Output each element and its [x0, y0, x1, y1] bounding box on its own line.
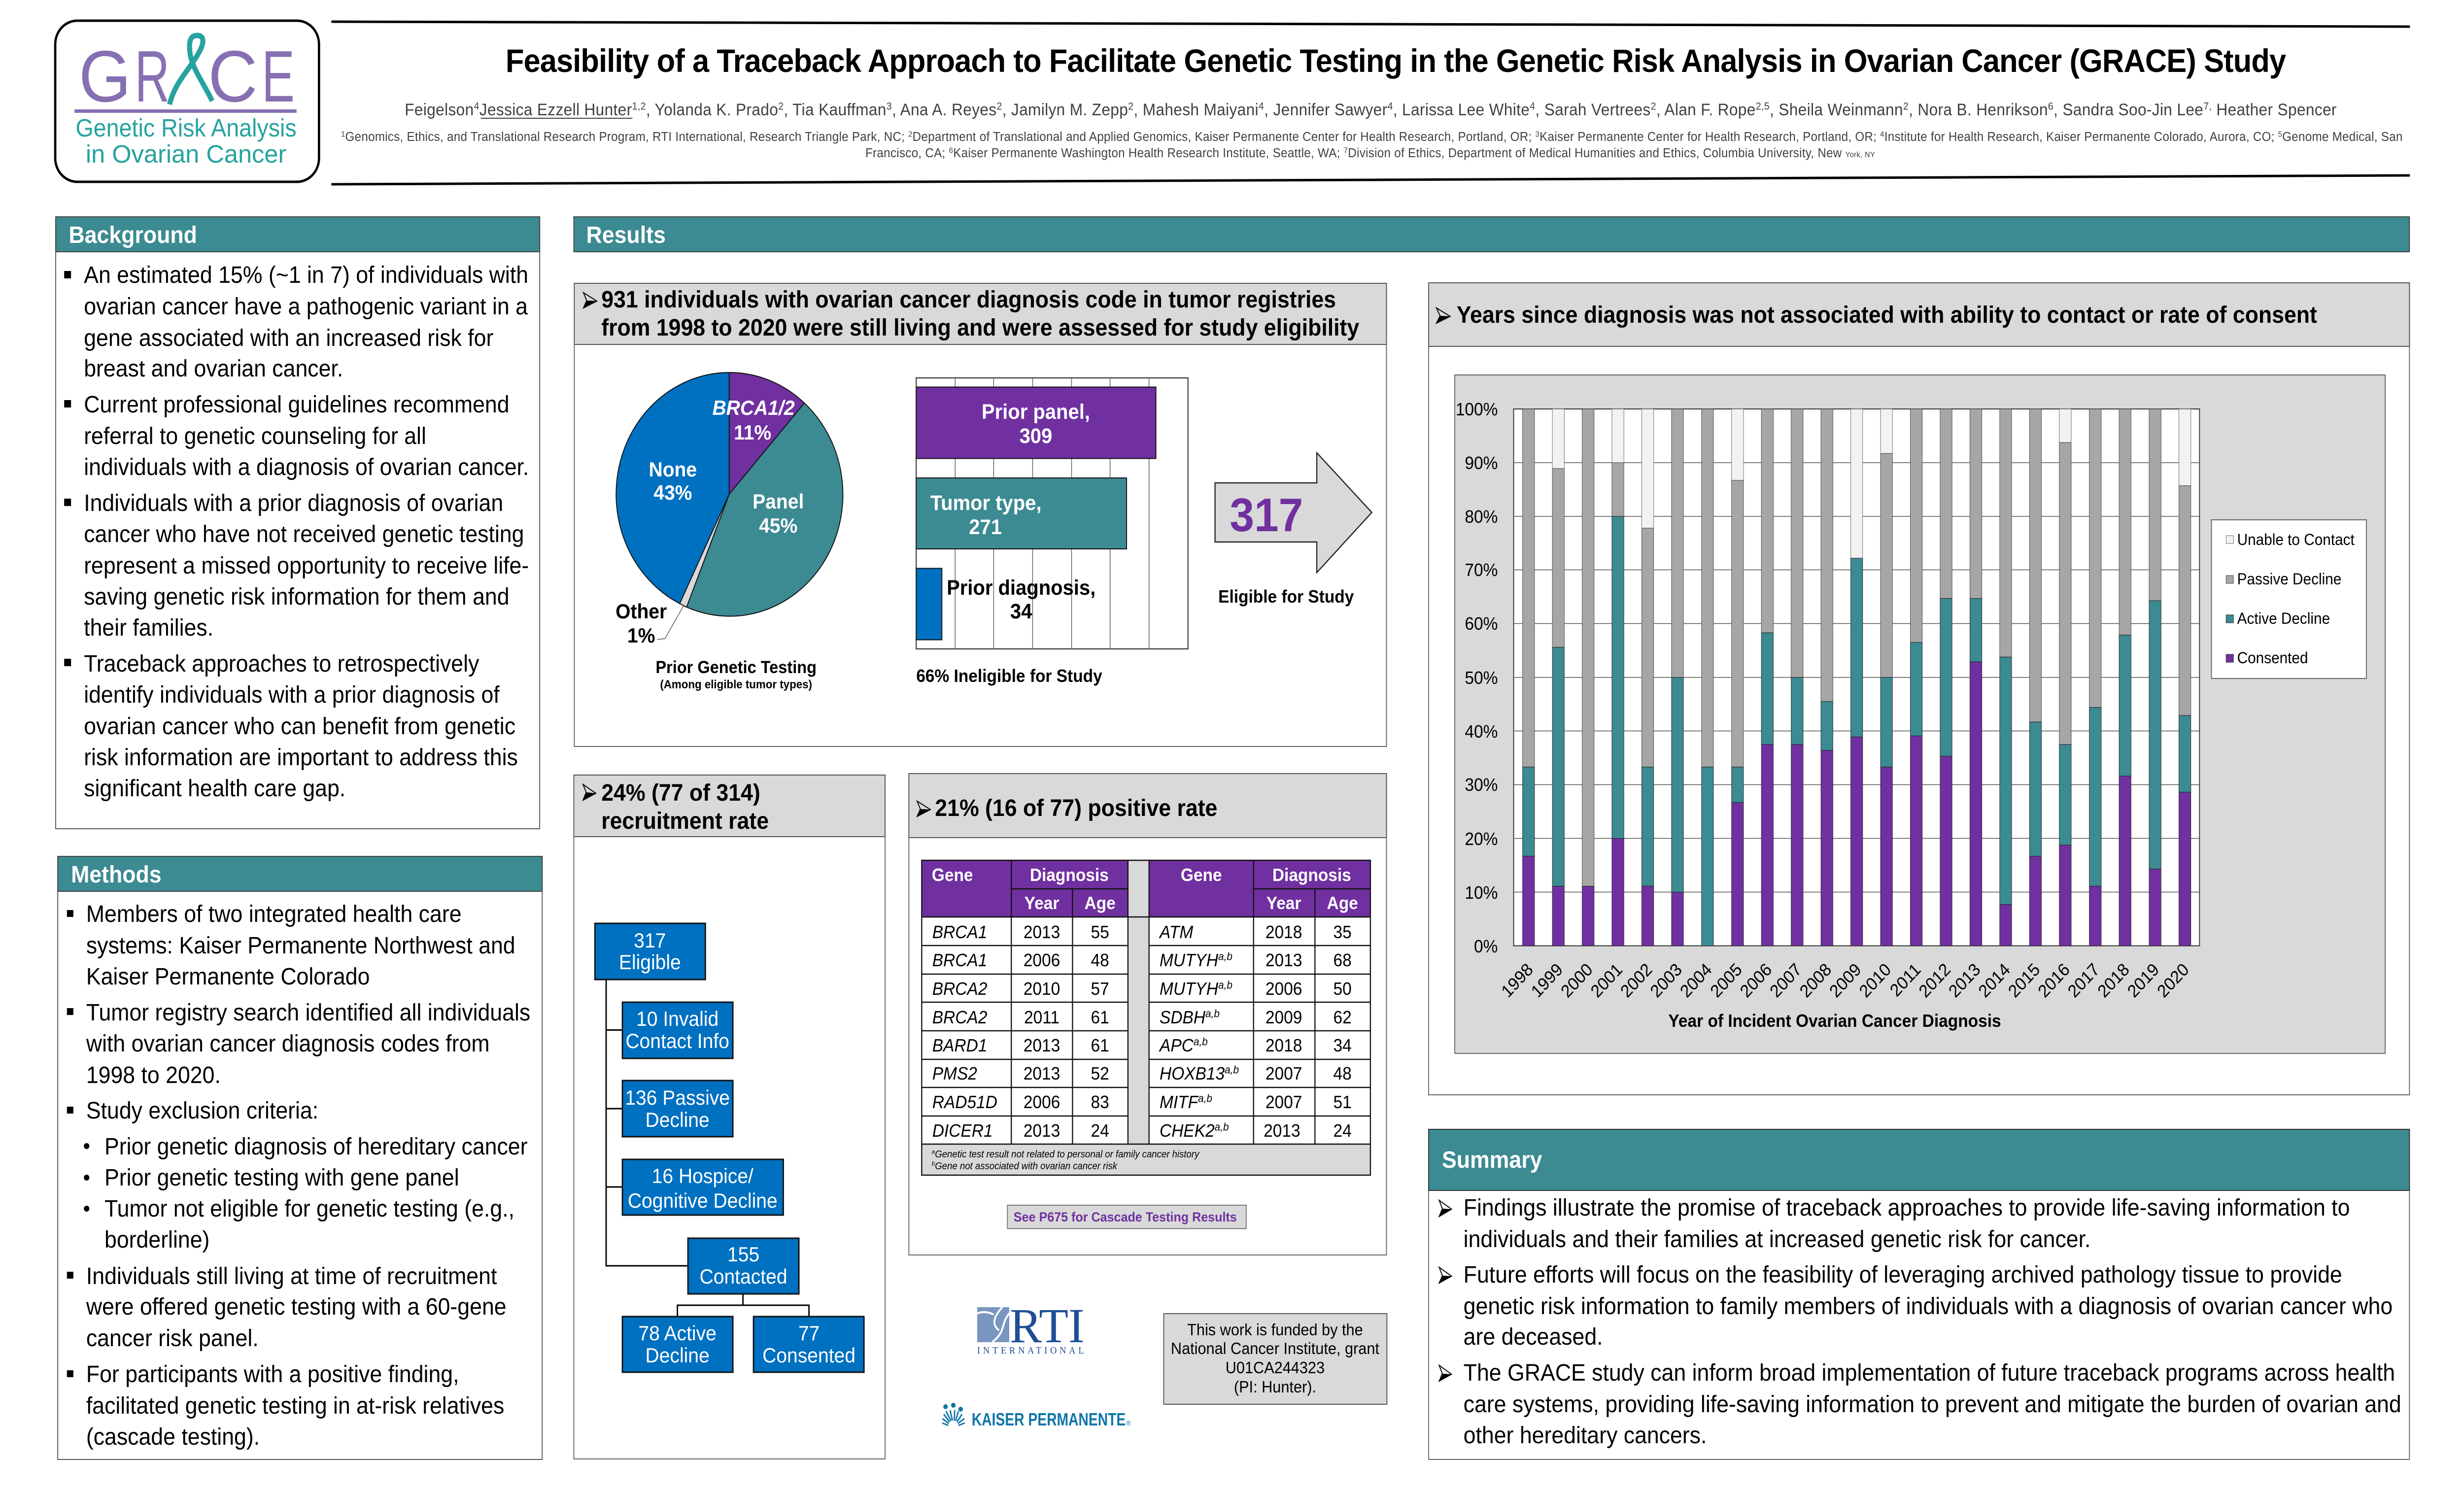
panel: years since diagnosis [1429, 283, 2409, 1095]
bullet: prevalence [64, 262, 528, 381]
legend [2212, 520, 2366, 678]
title: Feasibility of a Traceback Approach to Facilitate Genetic Testing in the Genetic Risk Analysis in Ovarian Cancer (GRACE) Study [506, 42, 2287, 79]
authors: Feigelson4Jessica Ezzell Hunter1,2, Yolanda K. Prado2, Tia Kauffman3, Ana A. Reyes2, Jamilyn M. Zepp2, Mahesh Maiyani4, Jennifer Sawyer4, Larissa Lee White4, Sarah Vertrees2, Alan F. Rope2,5, Sheila Weinmann2, Nora B. Henrikson6, Sandra Soo-Jin Lee7, Heather Spencer [405, 100, 2337, 119]
logo: Kaiser Permanente: KAISER PERMANENTE [972, 1410, 1126, 1429]
x axis labels: 2005 [1707, 960, 1745, 1001]
bullet: missed opportunity: saving genetic risk information for them and [84, 583, 510, 610]
box: passive decline [622, 1081, 733, 1137]
callout: cascade testing: See P675 for Cascade Testing Results [1014, 1209, 1237, 1224]
box: hospice: Cognitive Decline [628, 1189, 778, 1212]
x axis labels: 2010 [1856, 960, 1895, 1001]
x axis labels: 2008 [1796, 960, 1835, 1001]
x axis labels: 2007 [1767, 960, 1805, 1001]
bullet: cascade testing: facilitated genetic testing in at-risk relatives [86, 1392, 504, 1419]
funding box: U01CA244323 [1226, 1358, 1325, 1377]
icon: chevron [1437, 308, 1450, 323]
heading: 931 individuals: from 1998 to 2020 were still living and were assessed for study eligibility [601, 314, 1359, 340]
logo: GRACE: Genetic Risk Analysis [75, 114, 297, 142]
bullet: guidelines: referral to genetic counseling for all [84, 423, 426, 449]
x axis labels: 1999 [1528, 960, 1567, 1001]
bullet: traceback: ovarian cancer who can benefit from genetic [84, 713, 515, 739]
y axis labels: 70% [1465, 561, 1498, 580]
heading: 21% positive rate: 21% (16 of 77) positive rate [935, 795, 1217, 821]
x axis labels: 2001 [1587, 960, 1626, 1001]
box: consented [753, 1317, 864, 1372]
bullet: cascade testing [67, 1361, 504, 1450]
pie chart: prior genetic testing [616, 372, 843, 647]
table rows: right: 2013 [1264, 1121, 1300, 1141]
header rule top [331, 22, 2410, 27]
summary point: findings: individuals and their families at increased genetic risk for cancer. [1464, 1226, 2090, 1252]
bullet: health systems: systems: Kaiser Permanente Northwest and [86, 932, 515, 958]
bullet: exclusion criteria [67, 1097, 528, 1253]
table rows: left: 2013 [1024, 1036, 1060, 1055]
table rows: right: 48 [1334, 1064, 1352, 1084]
box: passive decline: 136 Passive [625, 1086, 730, 1109]
pie caption [655, 658, 817, 691]
table rows: left: 57 [1091, 980, 1109, 999]
box: 317 eligible: 317 [634, 929, 666, 952]
table rows: left: 55 [1091, 923, 1109, 942]
bullet: living individuals: cancer risk panel. [86, 1325, 259, 1351]
affiliations [341, 130, 2402, 160]
table rows: right: 2006 [1266, 980, 1302, 999]
heading: summary: Summary [1442, 1147, 1542, 1173]
bullet: living individuals [67, 1263, 507, 1351]
box: 317 eligible: Eligible [619, 950, 681, 974]
box: invalid contact [622, 1002, 733, 1058]
bullet: living individuals: were offered genetic testing with a 60-gene [86, 1293, 507, 1320]
bullet: exclusion criteria: borderline) [104, 1226, 209, 1253]
x axis labels: 2017 [2064, 960, 2103, 1001]
bullet: cascade testing: For participants with a positive finding, [86, 1361, 459, 1387]
bullet: missed opportunity [64, 490, 529, 641]
bullet: living individuals: Individuals still living at time of recruitment [86, 1263, 497, 1289]
logo: Kaiser Permanente [942, 1403, 1131, 1429]
table header: Age [1085, 894, 1116, 913]
table rows: left: 61 [1091, 1036, 1109, 1055]
bar chart: ineligible: Tumor type, [930, 491, 1041, 514]
pie chart: prior genetic testing: 43% [653, 481, 692, 504]
heading: background: Background [69, 222, 197, 248]
table footnotes: aGenetic test result not related to personal or family cancer history [932, 1148, 1200, 1160]
table rows: left: BRCA2 [932, 1008, 987, 1027]
bullet: exclusion criteria: Prior genetic diagnosis of hereditary cancer [104, 1133, 528, 1159]
logo: RTI International [977, 1298, 1085, 1356]
panel: background [56, 217, 540, 829]
table header [932, 866, 1358, 913]
x axis labels: 2013 [1946, 960, 1984, 1001]
y axis labels: 0% [1474, 937, 1498, 956]
summary point: future efforts: Future efforts will focus on the feasibility of leveraging archived pathology tissue to provide [1464, 1261, 2342, 1287]
summary point: broad implementation [1439, 1359, 2401, 1448]
table rows: left [932, 923, 1109, 1141]
bullet: prevalence: An estimated 15% (~1 in 7) of individuals with [84, 262, 528, 288]
bar chart: ineligible: Prior panel, [982, 400, 1090, 423]
bullet: health systems [67, 901, 515, 989]
bullet: missed opportunity: represent a missed opportunity to receive life- [84, 552, 529, 578]
table header: Diagnosis [1030, 866, 1109, 885]
table header: Year [1025, 894, 1059, 913]
logo: GRACE: E [262, 36, 295, 117]
table rows: right: 2018 [1266, 923, 1302, 942]
table header: Gene [932, 866, 973, 885]
table rows: right: MUTYHa,b [1160, 978, 1232, 999]
table rows: right: CHEK2a,b [1160, 1120, 1229, 1141]
table rows: right: 50 [1334, 980, 1352, 999]
results banner [574, 217, 2409, 252]
summary point: broad implementation: other hereditary cancers. [1464, 1422, 1707, 1448]
table rows: right: APCa,b [1159, 1035, 1208, 1055]
heading: methods: Methods [71, 861, 162, 887]
affiliations: Francisco, CA; 6Kaiser Permanente Washington Health Research Institute, Seattle, WA; 7Division of Ethics, Department of Medical Humanities and Ethics, Columbia University, New York, NY [865, 146, 1875, 160]
table rows: right: 34 [1334, 1036, 1352, 1055]
table rows: left: 2006 [1024, 1093, 1060, 1112]
funding box: This work is funded by the [1187, 1321, 1363, 1339]
x axis title: Year of Incident Ovarian Cancer Diagnosis [1668, 1012, 2001, 1031]
table rows: right: 2007 [1266, 1064, 1302, 1084]
table rows: left: 24 [1091, 1121, 1109, 1141]
bullet: traceback: Traceback approaches to retrospectively [84, 650, 479, 677]
icon: chevron [583, 784, 596, 800]
bullet: traceback: risk information are important to address this [84, 744, 518, 770]
y axis labels: 90% [1465, 454, 1498, 473]
panel: methods [58, 856, 542, 1459]
box: invalid contact: 10 Invalid [636, 1007, 719, 1030]
table rows: left: 2010 [1024, 980, 1060, 999]
x axis labels [1498, 960, 2192, 1001]
pie chart: prior genetic testing: None [649, 458, 697, 481]
legend: Consented [2237, 649, 2308, 667]
heading: years since diagnosis: Years since diagnosis was not associated with ability to contact or rate of consent [1457, 302, 2317, 328]
bullet: exclusion criteria: Tumor not eligible for genetic testing (e.g., [104, 1195, 514, 1221]
bullet: tumor registry: 1998 to 2020. [86, 1062, 221, 1088]
table rows: right: 2007 [1266, 1093, 1302, 1112]
funding box: (PI: Hunter). [1234, 1378, 1316, 1396]
icon: chevron [583, 293, 597, 308]
box: active decline [622, 1317, 733, 1372]
box: consented: Consented [762, 1344, 856, 1367]
x axis labels: 2020 [2154, 960, 2192, 1001]
table rows: left: 2013 [1024, 923, 1060, 942]
box: 317 eligible [595, 923, 705, 980]
pie chart: prior genetic testing: Other [616, 600, 667, 623]
flow chart [595, 923, 864, 1372]
table rows: right: 68 [1334, 951, 1352, 970]
summary point: future efforts: genetic risk information to family members of individuals with a diagnosis of ovarian cancer who [1464, 1293, 2393, 1319]
bullet: tumor registry: Tumor registry search identified all individuals [86, 999, 530, 1025]
funding box [1164, 1314, 1387, 1404]
bars [1523, 409, 2191, 946]
x axis labels: 2003 [1647, 960, 1686, 1001]
bullet: cascade testing: (cascade testing). [86, 1423, 260, 1450]
y axis labels: 60% [1465, 614, 1498, 634]
table header: Age [1327, 894, 1358, 913]
table rows: right: 2013 [1266, 951, 1302, 970]
pie chart: prior genetic testing: BRCA1/2 [712, 396, 795, 419]
box: active decline: 78 Active [638, 1321, 717, 1345]
table rows: right: 62 [1334, 1008, 1352, 1027]
table rows: left: 48 [1091, 951, 1109, 970]
bullet: health systems: Members of two integrated health care [86, 901, 462, 927]
bullet: traceback: identify individuals with a prior diagnosis of [84, 681, 500, 708]
panel: recruitment [574, 775, 885, 1459]
x axis labels: 2016 [2035, 960, 2073, 1001]
bar chart: ineligible: Prior diagnosis, [947, 576, 1095, 599]
x axis labels: 1998 [1498, 960, 1537, 1001]
table rows: left: BRCA2 [932, 980, 987, 999]
logo: GRACE [55, 21, 319, 182]
box: contacted [688, 1238, 799, 1294]
table rows: right: ATM [1159, 923, 1193, 942]
table rows: left: 2011 [1024, 1008, 1060, 1027]
table rows: right: 2018 [1266, 1036, 1302, 1055]
table rows: right: 51 [1334, 1093, 1352, 1112]
box: contacted: 155 [727, 1243, 759, 1266]
logo: GRACE: R [135, 36, 170, 117]
y axis labels: 20% [1465, 830, 1498, 849]
table rows: right: 2009 [1266, 1008, 1302, 1027]
callout: cascade testing [1007, 1205, 1246, 1229]
box: contacted: Contacted [700, 1265, 787, 1288]
x axis labels: 2002 [1617, 960, 1656, 1001]
box: invalid contact: Contact Info [625, 1029, 729, 1052]
table rows: right: HOXB13a,b [1160, 1063, 1239, 1084]
table rows: left: 83 [1091, 1093, 1109, 1112]
bar chart caption: 66% Ineligible for Study [916, 667, 1102, 686]
table rows: right: MUTYHa,b [1160, 949, 1232, 970]
x axis labels: 2018 [2094, 960, 2133, 1001]
bullet: health systems: Kaiser Permanente Colorado [86, 963, 370, 989]
heading: 24% recruitment: 24% (77 of 314) [601, 779, 760, 806]
x axis labels: 2006 [1737, 960, 1776, 1001]
table footnotes [932, 1148, 1200, 1172]
logo: RTI International: INTERNATIONAL [977, 1345, 1084, 1356]
table rows: right: 24 [1334, 1121, 1352, 1141]
table rows: left: DICER1 [932, 1121, 992, 1141]
affiliations: 1Genomics, Ethics, and Translational Research Program, RTI International, Research Triangle Park, NC; 2Department of Translational and Applied Genomics, Kaiser Permanente Center for Health Research, Portland, OR; 3Kaiser Permanente Center for Health Research, Portland, OR; 4Institute for Health Research, Kaiser Permanente Colorado, Aurora, CO; 5Genome Medical, San [341, 130, 2402, 144]
bar chart: ineligible: 271 [969, 515, 1002, 539]
legend: Active Decline [2237, 610, 2330, 627]
bar chart: ineligible: 309 [1020, 424, 1052, 447]
arrow: 317 eligible: 317 [1230, 488, 1303, 542]
bullet: tumor registry [67, 999, 530, 1088]
box: consented: 77 [798, 1321, 820, 1345]
panel: summary [1429, 1129, 2409, 1459]
table rows: left: RAD51D [932, 1093, 997, 1112]
bullet: tumor registry: with ovarian cancer diagnosis codes from [86, 1030, 490, 1056]
bullet: traceback [64, 650, 518, 801]
bullet: guidelines [64, 391, 529, 480]
arrow caption: Eligible for Study [1218, 587, 1354, 607]
x axis labels: 2019 [2124, 960, 2163, 1001]
x axis labels: 2014 [1975, 960, 2014, 1001]
pie chart: prior genetic testing: Panel [753, 490, 804, 513]
summary point: future efforts [1439, 1261, 2393, 1350]
table rows: left: BRCA1 [932, 951, 987, 970]
panel: eligibility [574, 283, 1386, 746]
logo: GRACE: G [79, 36, 131, 117]
y axis labels: 50% [1465, 669, 1498, 688]
y axis labels: 100% [1456, 400, 1498, 419]
bullet: guidelines: individuals with a diagnosis of ovarian cancer. [84, 454, 529, 480]
funding box: National Cancer Institute, grant [1171, 1339, 1379, 1357]
bullet: exclusion criteria: Prior genetic testing with gene panel [104, 1164, 459, 1190]
bullet: prevalence: ovarian cancer have a pathogenic variant in a [84, 293, 528, 319]
table rows: right: 35 [1334, 923, 1352, 942]
heading: 931 individuals: 931 individuals with ovarian cancer diagnosis code in tumor registries [601, 286, 1336, 312]
box: hospice [622, 1159, 783, 1215]
results banner: Results [586, 222, 666, 248]
table header: Gene [1181, 866, 1222, 885]
logo: GRACE: C [208, 36, 258, 117]
panel: positive rate [909, 774, 1386, 1255]
x axis labels: 2000 [1558, 960, 1596, 1001]
table rows: left: 2006 [1024, 951, 1060, 970]
table rows: right: SDBHa,b [1160, 1007, 1220, 1027]
table rows: left: 2013 [1024, 1064, 1060, 1084]
icon: chevron [917, 801, 930, 816]
bar chart: ineligible [916, 378, 1188, 649]
table header: Diagnosis [1272, 866, 1351, 885]
x axis labels: 2011 [1886, 960, 1924, 1001]
bullet: traceback: significant health care gap. [84, 775, 345, 801]
bullet: prevalence: breast and ovarian cancer. [84, 355, 343, 381]
box: hospice: 16 Hospice/ [652, 1164, 754, 1187]
table rows: left: BARD1 [932, 1036, 987, 1055]
pie caption: (Among eligible tumor types) [660, 677, 812, 691]
legend: Passive Decline [2237, 570, 2341, 588]
pie caption: Prior Genetic Testing [655, 658, 817, 677]
summary point: broad implementation: The GRACE study can inform broad implementation of future traceback programs across health [1464, 1359, 2395, 1386]
bullet: missed opportunity: Individuals with a prior diagnosis of ovarian [84, 490, 503, 516]
x axis labels: 2015 [2005, 960, 2044, 1001]
table: positive findings [922, 860, 1370, 1175]
table rows: left: 2013 [1024, 1121, 1060, 1141]
table header: Year [1266, 894, 1301, 913]
summary point: findings [1439, 1194, 2350, 1252]
bullet: missed opportunity: their families. [84, 614, 213, 641]
y axis labels: 40% [1465, 722, 1498, 742]
y axis labels: 10% [1465, 883, 1498, 903]
logo: GRACE: in Ovarian Cancer [86, 140, 286, 168]
x axis labels: 2009 [1826, 960, 1865, 1001]
summary point: findings: Findings illustrate the promise of traceback approaches to provide life-saving information to [1464, 1194, 2350, 1220]
arrow: 317 eligible [1215, 453, 1372, 573]
table rows: right [1159, 923, 1352, 1141]
table footnotes: bGene not associated with ovarian cancer risk [932, 1160, 1118, 1172]
box: passive decline: Decline [646, 1108, 710, 1131]
pie chart: prior genetic testing: 1% [627, 624, 655, 647]
x axis labels: 2004 [1677, 960, 1715, 1001]
summary point: future efforts: are deceased. [1464, 1323, 1603, 1350]
bullet: prevalence: gene associated with an increased risk for [84, 325, 493, 351]
header rule bottom [331, 175, 2410, 184]
summary point: broad implementation: care systems, providing life-saving information to prevent and mitigate the burden of ovarian and [1464, 1391, 2401, 1417]
legend: Unable to Contact [2237, 531, 2355, 548]
table rows: left: BRCA1 [932, 923, 987, 942]
chart: stacked bars by year [1455, 375, 2385, 1053]
logo: Kaiser Permanente: ® [1126, 1420, 1131, 1427]
table rows: left: 52 [1091, 1064, 1109, 1084]
table rows: left: PMS2 [932, 1064, 977, 1084]
y axis labels [1456, 400, 1498, 956]
pie chart: prior genetic testing: 45% [759, 514, 797, 537]
heading: 24% recruitment: recruitment rate [601, 808, 769, 834]
pie chart: prior genetic testing: 11% [734, 421, 771, 444]
bar chart: ineligible: 34 [1010, 599, 1032, 623]
bullet: missed opportunity: cancer who have not received genetic testing [84, 521, 524, 547]
table rows: right: MITFa,b [1160, 1091, 1212, 1112]
y axis labels: 30% [1465, 776, 1498, 795]
bullet: guidelines: Current professional guidelines recommend [84, 391, 510, 417]
x axis labels: 2012 [1916, 960, 1954, 1001]
box: active decline: Decline [646, 1344, 710, 1367]
y axis labels: 80% [1465, 508, 1498, 527]
logo: RTI International: RTI [1010, 1298, 1085, 1353]
table rows: left: 61 [1091, 1008, 1109, 1027]
bullet: exclusion criteria: Study exclusion criteria: [86, 1097, 318, 1123]
